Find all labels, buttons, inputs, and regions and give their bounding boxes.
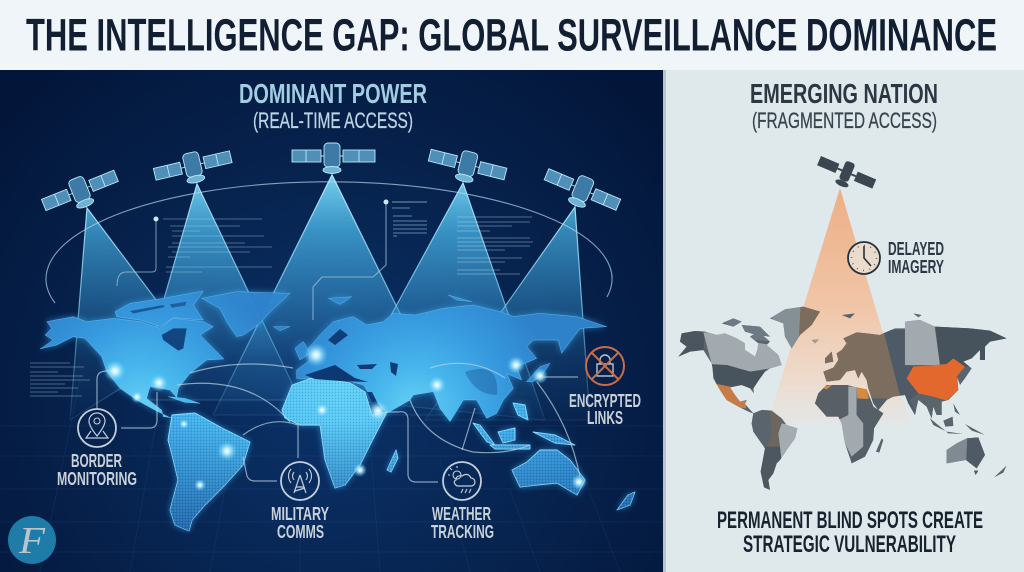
label: delayed imagery — [888, 239, 944, 277]
heading: dominant power: DOMINANT POWER — [239, 78, 427, 109]
conclusion: blind spots — [717, 507, 983, 558]
heading: emerging nation: EMERGING NATION — [750, 78, 938, 109]
label: military comms: MILITARY — [271, 504, 329, 524]
coverage beam 2 — [135, 184, 300, 400]
label: weather tracking: WEATHER — [432, 504, 491, 524]
satellite: lone dark — [813, 151, 879, 198]
panel: dominant power — [0, 70, 666, 572]
subheading: fragmented access: (FRAGMENTED ACCESS) — [752, 108, 937, 133]
label: encrypted links — [569, 391, 641, 428]
satellite 2 — [152, 144, 235, 191]
city light hotspots — [104, 343, 587, 491]
coverage beam 1 — [70, 208, 190, 420]
label: delayed imagery: DELAYED — [888, 239, 944, 259]
panel: emerging nation — [678, 84, 1006, 552]
coverage beam 4 — [345, 183, 545, 420]
label: border monitoring: MONITORING — [57, 469, 137, 489]
icon: clock — [848, 242, 880, 274]
label: encrypted links: LINKS — [587, 408, 623, 428]
logo badge — [8, 516, 56, 564]
label: encrypted links: ENCRYPTED — [569, 391, 641, 411]
coverage beam: single narrow — [767, 188, 910, 425]
label: border monitoring — [57, 451, 137, 489]
satellite 1 — [39, 164, 123, 221]
coverage beam 5 — [425, 207, 590, 420]
subheading: real-time access: (REAL-TIME ACCESS) — [253, 108, 413, 133]
icon: border monitoring — [78, 409, 116, 447]
icon: military comms — [281, 462, 319, 500]
world map: real-time coverage — [40, 291, 635, 531]
orbit ring — [46, 182, 612, 303]
beam overlay on map — [135, 175, 545, 420]
icon: encrypted links crossed out — [586, 347, 624, 385]
coverage beam 3 — [213, 175, 450, 415]
satellite 4 — [426, 143, 509, 191]
label: border monitoring: BORDER — [71, 451, 122, 471]
label: delayed imagery: IMAGERY — [888, 257, 944, 277]
data callout blocks — [30, 200, 533, 396]
logo badge: F — [18, 520, 46, 562]
label: weather tracking: TRACKING — [431, 522, 494, 542]
world map: fragmented coverage — [670, 300, 1013, 492]
label: military comms: COMMS — [277, 522, 324, 542]
satellite 5 — [540, 162, 623, 221]
label: military comms — [271, 504, 329, 542]
satellite 3 — [292, 143, 375, 174]
icon: weather tracking — [443, 462, 481, 500]
label: weather tracking — [431, 504, 494, 542]
connection arcs — [97, 363, 580, 482]
